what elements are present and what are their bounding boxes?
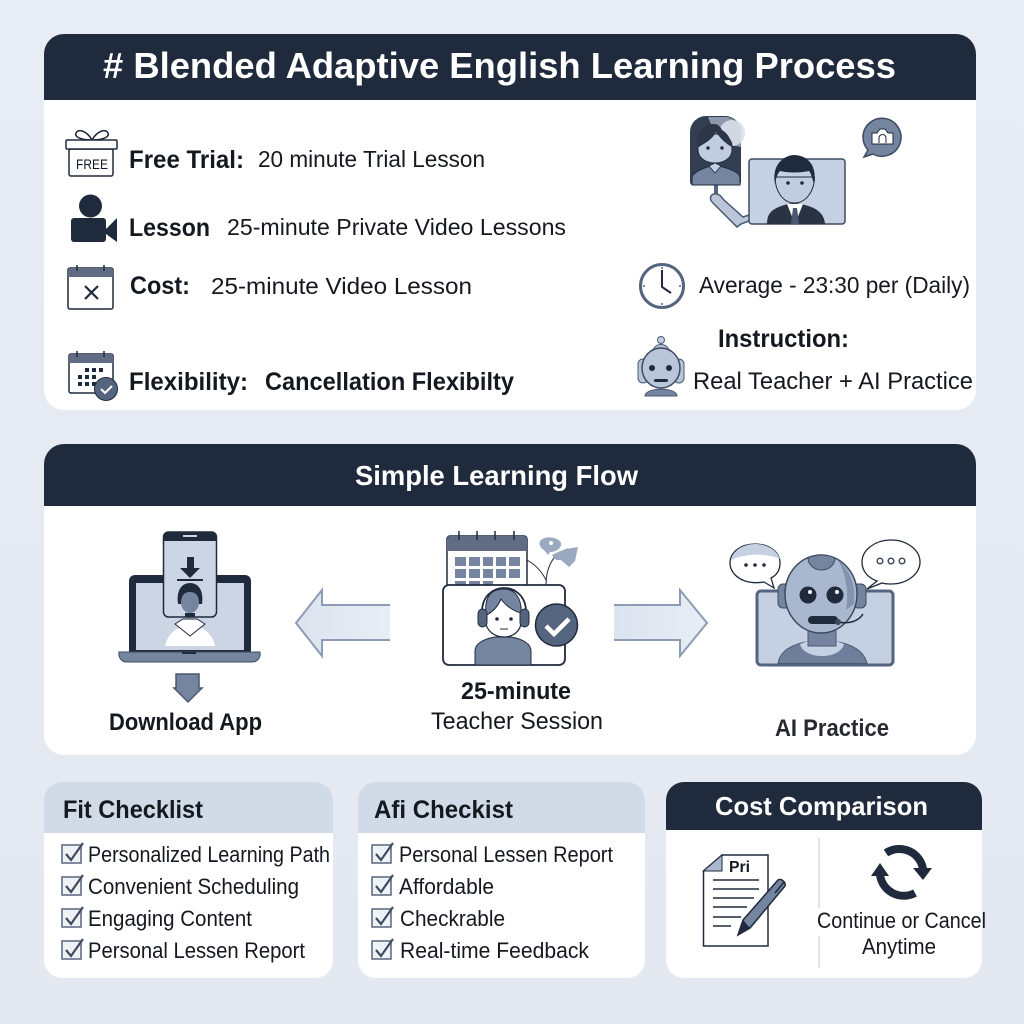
panel: overview (44, 34, 976, 410)
icon: robot tutor (638, 336, 684, 396)
panel: simple learning flow (44, 444, 976, 755)
checklist item: checkrable: Checkrable (400, 906, 505, 931)
checklist item: affordable: Affordable (399, 874, 494, 899)
heading bar: cost comparison: Cost Comparison (715, 791, 928, 821)
heading: afi checkist (358, 782, 645, 833)
label: AI practice: AI Practice (775, 715, 889, 742)
icon: free trial gift: FREE (76, 157, 108, 172)
icon: teacher session with calendar (443, 531, 578, 665)
text: continue or cancel: Anytime (862, 934, 936, 959)
text: continue or cancel (817, 908, 986, 959)
icon: price document and pen (704, 855, 785, 946)
icon: flexibility calendar (69, 351, 118, 400)
icon: free trial gift (66, 131, 117, 176)
row: free trial (129, 146, 485, 174)
icon: clock (640, 264, 684, 308)
label: teacher session: Teacher Session (431, 708, 603, 735)
icon: price document and pen: Pri (729, 859, 750, 876)
arrow: pointing right (614, 590, 707, 656)
row: flexibility: Cancellation Flexibilty (265, 368, 514, 396)
panel: fit checklist (44, 782, 333, 978)
icon: refresh arrows (871, 849, 932, 896)
row: flexibility: Flexibility: (129, 368, 248, 396)
heading bar: cost comparison (666, 782, 982, 830)
icon: cost calendar (68, 265, 113, 309)
text: average time: Average - 23:30 per (Daily) (699, 272, 970, 298)
heading bar: process title: # Blended Adaptive English Learning Process (103, 45, 896, 86)
row: cost: 25-minute Video Lesson (211, 273, 472, 299)
row: free trial: Free Trial: (129, 146, 244, 174)
heading: fit checklist: Fit Checklist (63, 796, 204, 824)
icon: AI robot on screen (730, 540, 920, 665)
checklist item: personal lessen report: Personal Lessen Report (88, 938, 305, 963)
heading: afi checkist: Afi Checkist (374, 796, 514, 824)
row: lesson: Lesson (129, 214, 210, 242)
row: free trial: 20 minute Trial Lesson (258, 146, 485, 172)
checklist item: personalized learning path: Personalized Learning Path (88, 842, 330, 867)
checklist item: real-time feedback: Real-time Feedback (400, 938, 590, 963)
icon: laptop and phone download (119, 532, 260, 662)
arrow: pointing left (296, 590, 390, 656)
text: instruction: Instruction: (718, 325, 849, 353)
label: teacher session: 25-minute (461, 678, 571, 705)
checklist item: convenient scheduling: Convenient Scheduling (88, 874, 299, 899)
label: download app: Download App (109, 709, 262, 736)
panel: cost comparison (666, 782, 986, 978)
checklist item: personal lessen report: Personal Lessen Report (399, 842, 613, 867)
row: cost: Cost: (130, 272, 190, 300)
heading bar: flow title: Simple Learning Flow (355, 460, 638, 491)
checklist item: engaging content: Engaging Content (88, 906, 252, 931)
heading bar: flow title (44, 444, 976, 506)
panel: afi checklist (358, 782, 645, 978)
row: cost (130, 272, 472, 300)
row: flexibility (129, 368, 514, 396)
text: continue or cancel: Continue or Cancel (817, 908, 986, 933)
label: teacher session (431, 678, 603, 735)
heading: fit checklist (44, 782, 333, 833)
row: lesson: 25-minute Private Video Lessons (227, 214, 566, 240)
text: instruction detail: Real Teacher + AI Practice (693, 368, 973, 395)
illustration: student and teacher video call (690, 116, 901, 227)
arrow: down to download app (174, 674, 202, 702)
icon: video lesson (71, 194, 117, 242)
heading bar: process title (44, 34, 976, 100)
